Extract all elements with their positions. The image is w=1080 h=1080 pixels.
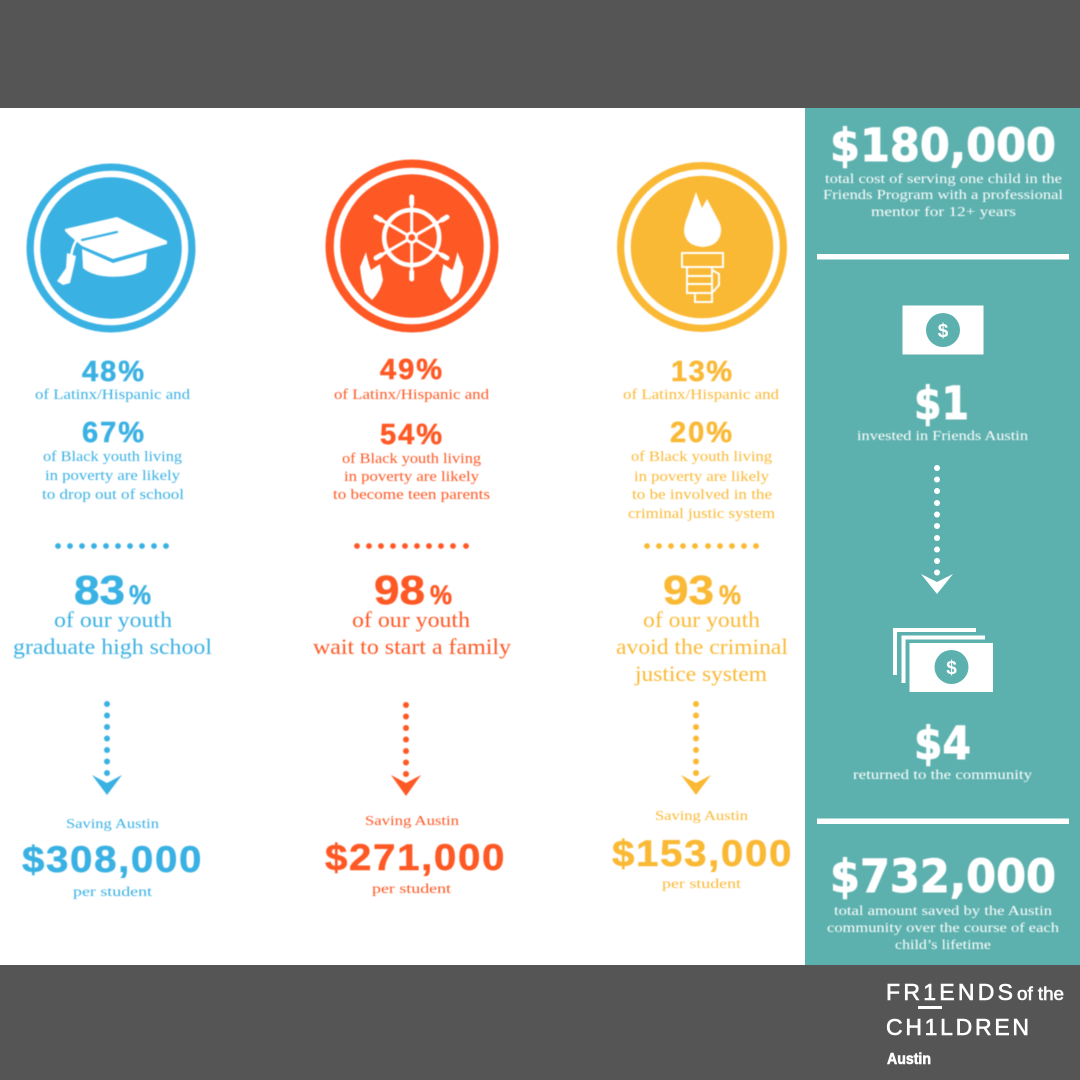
logo: Friends of the Children Austin: [886, 979, 1064, 1068]
logo: Friends of the Children Austin: FR1ENDS: [886, 979, 1013, 1005]
text: family outcome: [313, 607, 511, 659]
text: Latinx label: of Latinx/Hispanic and: [623, 387, 780, 403]
text: teen parent description: to become teen parents: [333, 487, 490, 503]
text: total saved description: total amount saved by the Austin: [834, 903, 1052, 918]
statistic: 20 percent: 20%: [670, 417, 732, 449]
text: graduate outcome: [13, 607, 212, 659]
statistic: 93 percent: %: [719, 580, 741, 610]
text: justice outcome: [616, 607, 788, 686]
logo: Friends of the Children Austin: CH1LDREN: [886, 1014, 1029, 1040]
text: criminal justice description: of Black youth living: [631, 449, 772, 465]
panel: education column: [13, 164, 212, 900]
icon: dollar bill: $: [938, 321, 949, 342]
text: total cost description: [823, 171, 1063, 219]
statistic: 93 percent: [663, 567, 741, 613]
statistic: 93 percent: 93: [663, 567, 714, 613]
arrow: [921, 465, 953, 594]
text: total saved description: child’s lifetime: [895, 937, 991, 952]
panel: justice column: [612, 162, 793, 892]
statistic: 13 percent: 13%: [671, 356, 732, 388]
text: saving Austin: Saving Austin: [66, 817, 159, 832]
panel: teen parent column: [313, 160, 511, 897]
text: criminal justice description: criminal justic system: [628, 506, 776, 522]
text: criminal justice description: to be involved in the: [632, 487, 772, 503]
amount: 271,000: $271,000: [325, 837, 506, 878]
statistic: 83 percent: [74, 567, 151, 613]
icon: stack of bills: [893, 628, 993, 692]
statistic: 67 percent: 67%: [82, 417, 144, 449]
text: total saved description: [827, 903, 1059, 952]
panel: return on investment sidebar: [805, 108, 1080, 965]
icon: graduation cap: [26, 164, 196, 332]
icon: torch: [617, 162, 787, 332]
text: criminal justice description: in poverty are likely: [634, 469, 770, 485]
text: teen parent description: [333, 451, 490, 503]
logo: Friends of the Children Austin: Austin: [887, 1051, 931, 1068]
statistic: 98 percent: 98: [374, 567, 425, 613]
text: total saved description: community over the course of each: [827, 920, 1059, 935]
icon: stack of bills: $: [946, 658, 957, 679]
text: family outcome: of our youth: [352, 607, 470, 632]
dotted divider: [644, 543, 759, 549]
text: per student: per student: [662, 877, 741, 892]
statistic: 83 percent: %: [129, 580, 151, 610]
text: family outcome: wait to start a family: [313, 634, 511, 659]
text: teen parent description: of Black youth living: [342, 451, 481, 467]
text: Latinx label: of Latinx/Hispanic and: [35, 387, 191, 403]
text: justice outcome: justice system: [634, 661, 767, 686]
text: dropout description: [42, 449, 184, 503]
icon: ship wheel with hands: [326, 160, 498, 332]
icon: dollar bill: [902, 306, 984, 354]
heading: one dollar: $1: [914, 377, 969, 430]
text: invested: invested in Friends Austin: [857, 428, 1028, 443]
text: returned: returned to the community: [853, 767, 1032, 782]
text: graduate outcome: of our youth: [54, 607, 172, 632]
text: saving Austin: Saving Austin: [365, 814, 459, 829]
text: saving Austin: Saving Austin: [655, 809, 748, 824]
statistic: 49 percent: 49%: [380, 354, 442, 386]
text: graduate outcome: graduate high school: [13, 634, 212, 659]
statistic: 54 percent: 54%: [380, 419, 442, 451]
text: total cost description: Friends Program with a professional: [823, 187, 1063, 202]
text: justice outcome: avoid the criminal: [616, 634, 788, 659]
heading: four dollars: $4: [914, 717, 971, 770]
arrow: [391, 702, 421, 796]
statistic: 83 percent: 83: [74, 567, 125, 613]
arrow: [681, 701, 711, 795]
text: Latinx label: of Latinx/Hispanic and: [334, 387, 490, 403]
text: justice outcome: of our youth: [643, 607, 760, 632]
text: dropout description: of Black youth living: [43, 449, 182, 465]
logo: Friends of the Children Austin: of the: [1017, 984, 1064, 1004]
heading: total cost: $180,000: [830, 119, 1056, 172]
dotted divider: [354, 543, 469, 549]
text: total cost description: mentor for 12+ years: [871, 204, 1016, 219]
text: per student: per student: [372, 882, 451, 897]
text: dropout description: in poverty are likely: [45, 468, 181, 484]
text: per student: per student: [73, 885, 152, 900]
dotted divider: [55, 543, 169, 549]
statistic: 48 percent: 48%: [82, 356, 144, 388]
heading: total saved: $732,000: [830, 850, 1056, 903]
arrow: [92, 701, 122, 795]
amount: 153,000: $153,000: [612, 833, 793, 874]
text: total cost description: total cost of serving one child in the: [825, 171, 1062, 186]
text: dropout description: to drop out of school: [42, 487, 184, 503]
text: criminal justice description: [628, 449, 776, 522]
statistic: 98 percent: %: [430, 580, 452, 610]
text: teen parent description: in poverty are likely: [344, 469, 480, 485]
statistic: 98 percent: [374, 567, 452, 613]
amount: 308,000: $308,000: [22, 839, 203, 880]
